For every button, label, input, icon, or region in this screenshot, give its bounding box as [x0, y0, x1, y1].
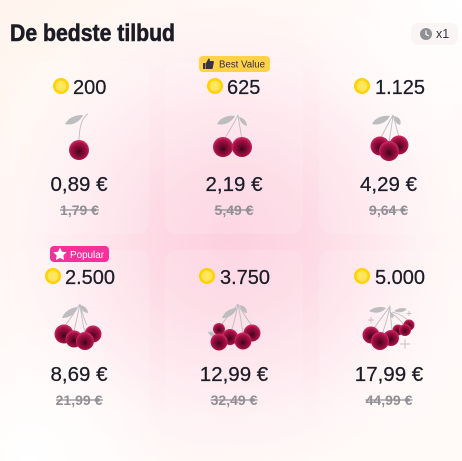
panel: offer 1.125 [319, 62, 458, 234]
icon: cherry [65, 114, 89, 160]
coin icon [199, 268, 215, 284]
panel: offer 2.500 [10, 250, 149, 426]
title: De bedste tilbud [10, 20, 175, 47]
panel: offer 3.750 [165, 250, 303, 426]
multiplier badge [411, 23, 458, 45]
icon: two cherries [213, 115, 252, 157]
old price: 9,64 € [369, 202, 408, 218]
panel: offer 200 [10, 62, 149, 234]
panel: offer 5.000 [319, 250, 458, 426]
multiplier badge: x1 [436, 27, 449, 41]
badge: best value [199, 56, 270, 72]
old price: 32,49 € [211, 392, 258, 408]
price: 2,19 € [206, 173, 263, 196]
coin icon [53, 78, 69, 94]
badge: popular: Popular [70, 250, 105, 261]
icon: three cherries [370, 115, 408, 161]
coin icon [354, 78, 370, 94]
coin amount: 3.750 [220, 267, 270, 289]
price: 17,99 € [355, 363, 424, 386]
old price: 21,99 € [56, 392, 103, 408]
icon: thumbs up [203, 58, 214, 69]
coin amount: 200 [73, 77, 106, 99]
coin icon [354, 268, 370, 284]
badge: best value: Best Value [219, 60, 266, 70]
price: 4,29 € [360, 173, 418, 196]
coin amount: 2.500 [65, 267, 115, 289]
coin amount: 5.000 [375, 267, 425, 289]
icon: four cherries [54, 304, 102, 350]
icon: star [53, 248, 67, 260]
price: 12,99 € [200, 363, 269, 386]
old price: 1,79 € [60, 202, 99, 218]
coin icon [207, 78, 223, 94]
coin amount: 625 [227, 77, 260, 99]
icon: five cherries [208, 304, 260, 350]
old price: 5,49 € [215, 202, 254, 218]
coin icon [45, 268, 61, 284]
price: 8,69 € [50, 363, 108, 386]
price: 0,89 € [50, 173, 108, 196]
coin amount: 1.125 [375, 77, 425, 99]
icon: cherries with sparkles [362, 306, 414, 350]
panel: offer 625 [165, 62, 303, 234]
badge: popular [50, 246, 109, 262]
old price: 44,99 € [366, 392, 413, 408]
